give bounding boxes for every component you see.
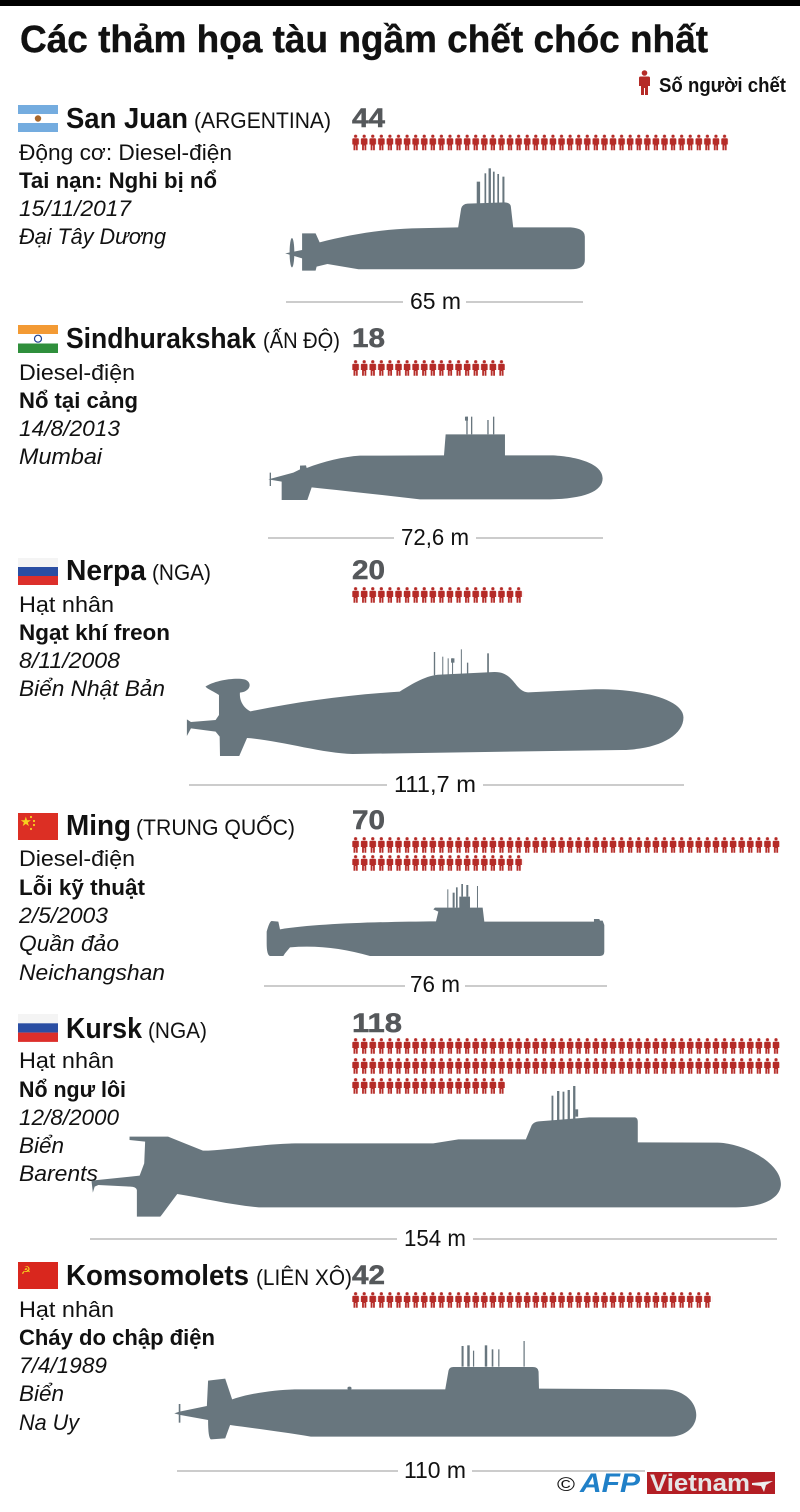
death count: 42 (352, 1260, 385, 1290)
people row (352, 134, 730, 150)
death count: 70 (352, 805, 385, 835)
name: San Juan (66, 103, 188, 135)
details: Barents (19, 1161, 98, 1186)
legend: number of deaths (639, 70, 786, 97)
details: Neichangshan (19, 960, 165, 985)
name: Sindhurakshak (66, 323, 257, 355)
credit: AFP Vietnam logo: AFP (579, 1468, 641, 1498)
details (18, 846, 165, 985)
people row (352, 587, 524, 603)
details: Động cơ: Diesel-điện (19, 140, 232, 165)
panel: Komsomolets (18, 1260, 712, 1483)
details (19, 592, 170, 701)
country: (NGA) (152, 560, 211, 585)
submarine silhouette (187, 649, 683, 756)
submarine silhouette (267, 884, 604, 956)
details: Nổ ngư lôi (19, 1077, 126, 1102)
details (19, 140, 232, 249)
details: Ngạt khí freon (19, 620, 170, 645)
credit: AFP Vietnam logo: Vietnam (650, 1470, 750, 1497)
panel: San Juan (18, 103, 730, 314)
details (19, 360, 138, 469)
details: Nổ tại cảng (19, 388, 138, 413)
details: 2/5/2003 (18, 903, 108, 928)
icon: Argentina flag (18, 105, 58, 132)
panel: Ming (18, 805, 781, 997)
people row (352, 360, 506, 376)
people row (352, 1292, 712, 1308)
legend: number of deaths: Số người chết (659, 74, 786, 97)
panel: Kursk (18, 1008, 781, 1251)
icon: China flag: ★ (20, 814, 32, 829)
details: 15/11/2017 (19, 196, 132, 221)
details: Cháy do chập điện (19, 1325, 215, 1350)
people rows (352, 837, 781, 871)
name: Kursk (66, 1013, 143, 1045)
title: Các thảm họa tàu ngầm chết chóc nhất (20, 19, 708, 61)
length scale: 154 m (404, 1225, 466, 1251)
details: Diesel-điện (19, 846, 135, 871)
death count: 18 (352, 323, 385, 353)
submarine silhouette (174, 1341, 696, 1439)
icon: USSR flag (18, 1262, 58, 1289)
death count: 118 (352, 1008, 402, 1038)
details: 8/11/2008 (19, 648, 120, 673)
credit: AFP Vietnam logo: © (557, 1475, 575, 1496)
details: Tai nạn: Nghi bị nổ (19, 168, 217, 193)
details: Na Uy (19, 1410, 81, 1435)
name: Nerpa (66, 555, 147, 587)
details: Hạt nhân (19, 1297, 114, 1322)
icon: Russia flag (18, 558, 58, 585)
details: 14/8/2013 (19, 416, 120, 441)
details (19, 1297, 215, 1435)
panel: Nerpa (18, 555, 684, 797)
details: Hạt nhân (19, 1048, 114, 1073)
death count: 44 (352, 103, 385, 133)
icon: Russia flag (18, 1014, 58, 1042)
submarine silhouette (268, 417, 603, 500)
submarine silhouette (285, 168, 585, 271)
details: Mumbai (19, 444, 103, 469)
details: Hạt nhân (19, 592, 114, 617)
details: Lỗi kỹ thuật (19, 875, 145, 900)
details: 7/4/1989 (19, 1353, 107, 1378)
country: (TRUNG QUỐC) (136, 814, 295, 840)
length scale: 111,7 m (394, 771, 476, 797)
country: (LIÊN XÔ) (256, 1265, 352, 1290)
name: Komsomolets (66, 1260, 249, 1292)
details: Đại Tây Dương (19, 224, 166, 249)
length scale: 110 m (404, 1457, 466, 1483)
icon: USSR flag: ☭ (21, 1265, 31, 1277)
panel: Sindhurakshak (18, 323, 603, 550)
details: Biển (19, 1381, 64, 1406)
credit: AFP Vietnam logo (557, 1468, 775, 1498)
details: Biển (19, 1133, 64, 1158)
details: 12/8/2000 (19, 1105, 119, 1130)
length scale: 72,6 m (401, 524, 469, 550)
death count: 20 (352, 555, 385, 585)
details: Quần đảo (19, 931, 119, 956)
details: Biển Nhật Bản (19, 676, 165, 701)
icon: China flag (18, 813, 58, 840)
details: Diesel-điện (19, 360, 135, 385)
country: (ẤN ĐỘ) (263, 328, 340, 353)
icon: India flag (18, 325, 58, 353)
submarine silhouette (91, 1086, 781, 1217)
name: Ming (66, 810, 131, 842)
length scale: 76 m (410, 971, 460, 997)
details (19, 1048, 126, 1186)
people rows (352, 1038, 781, 1094)
length scale: 65 m (410, 288, 461, 314)
country: (NGA) (148, 1018, 207, 1043)
country: (ARGENTINA) (194, 108, 331, 133)
